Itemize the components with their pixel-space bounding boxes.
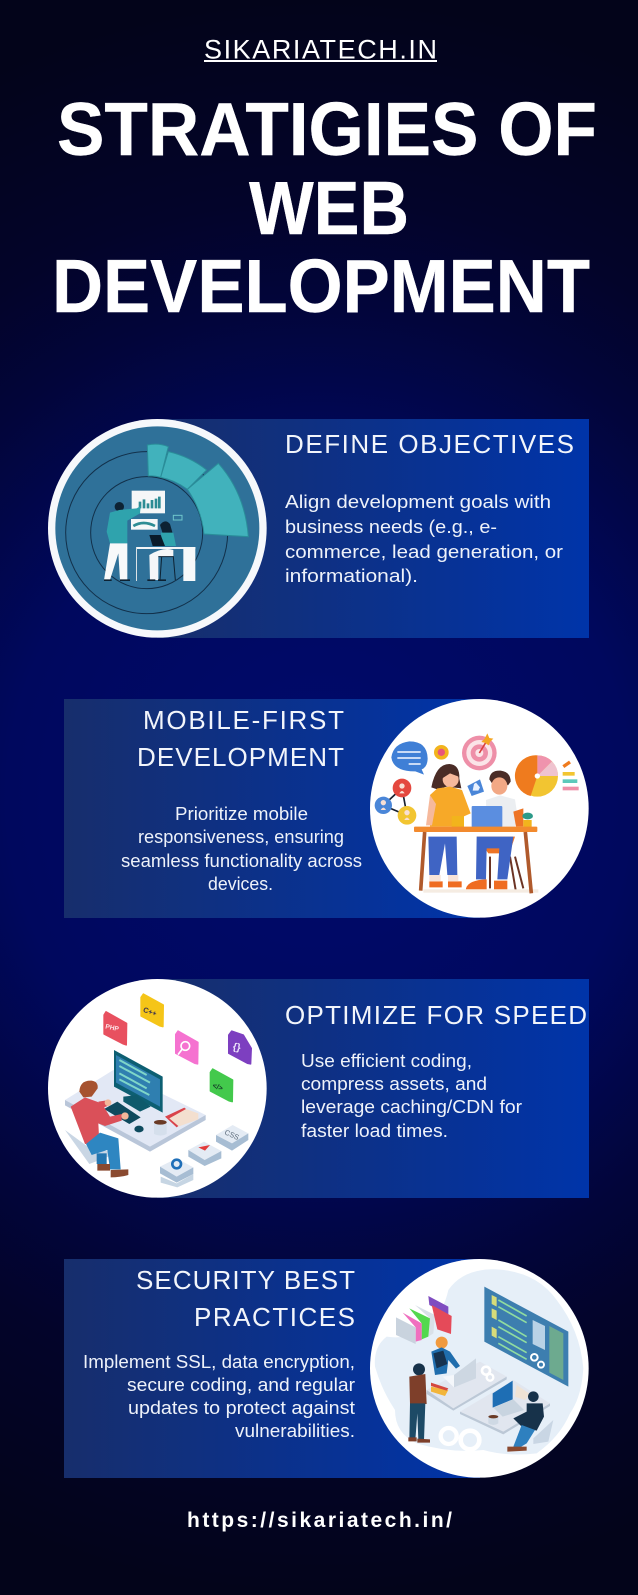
text block: define objectives: Align development goals with xyxy=(285,491,551,512)
icon: developer at desk circle: C++ xyxy=(142,1005,158,1018)
icon: developer at desk circle: {} xyxy=(232,1042,242,1054)
text block: security best practices: Implement SSL, data encryption, xyxy=(83,1351,355,1372)
heading: mobile-first development: DEVELOPMENT xyxy=(137,742,344,772)
text block: define objectives: commerce, lead generation, or xyxy=(285,541,563,562)
text block: optimize for speed xyxy=(301,1050,522,1141)
text block: mobile-first development xyxy=(121,803,362,894)
main title: WEB xyxy=(249,166,409,250)
main title: STRATIGIES OF xyxy=(57,87,597,171)
icon: developer at desk circle: </> xyxy=(211,1081,224,1093)
text block: mobile-first development: devices. xyxy=(208,873,273,894)
heading: security best practices: PRACTICES xyxy=(194,1302,355,1332)
heading: mobile-first development: MOBILE-FIRST xyxy=(143,705,344,735)
text block: mobile-first development: Prioritize mobile xyxy=(175,803,308,824)
heading: mobile-first development xyxy=(137,705,344,772)
icon: developer team circle xyxy=(370,1259,589,1478)
heading: define objectives: DEFINE OBJECTIVES xyxy=(285,429,574,459)
heading: optimize for speed: OPTIMIZE FOR SPEED xyxy=(285,1000,587,1030)
text block: optimize for speed: leverage caching/CDN for xyxy=(301,1096,522,1117)
heading: security best practices: SECURITY BEST xyxy=(136,1265,355,1295)
panel: optimize for speed xyxy=(48,979,589,1198)
text block: security best practices: secure coding, and regular xyxy=(127,1374,355,1395)
text block: optimize for speed: Use efficient coding, xyxy=(301,1050,472,1071)
icon: developer at desk circle: PHP xyxy=(105,1023,120,1033)
icon: team at desk circle xyxy=(370,699,589,918)
text block: security best practices: updates to protect against xyxy=(128,1397,355,1418)
main title xyxy=(52,87,597,328)
panel: define objectives xyxy=(48,419,589,638)
site name heading: SIKARIATECH.IN xyxy=(204,34,437,64)
text block: define objectives: informational). xyxy=(285,565,418,586)
text block: mobile-first development: seamless functionality across xyxy=(121,850,362,871)
panel: security best practices xyxy=(64,1259,589,1478)
icon: analytics team circle xyxy=(48,419,267,638)
text block: optimize for speed: compress assets, and xyxy=(301,1073,487,1094)
main title: DEVELOPMENT xyxy=(52,244,590,328)
footer url: https://sikariatech.in/ xyxy=(187,1509,452,1532)
icon: developer at desk circle: CSS xyxy=(223,1128,241,1142)
icon: developer at desk circle xyxy=(48,979,267,1198)
text block: define objectives xyxy=(285,491,563,586)
heading: security best practices xyxy=(136,1265,355,1332)
text block: security best practices: vulnerabilities. xyxy=(235,1420,355,1441)
panel: mobile-first development xyxy=(64,699,589,918)
text block: optimize for speed: faster load times. xyxy=(301,1120,448,1141)
text block: mobile-first development: responsiveness, ensuring xyxy=(138,826,344,847)
text block: define objectives: business needs (e.g., e- xyxy=(285,516,497,537)
text block: security best practices xyxy=(83,1351,355,1441)
